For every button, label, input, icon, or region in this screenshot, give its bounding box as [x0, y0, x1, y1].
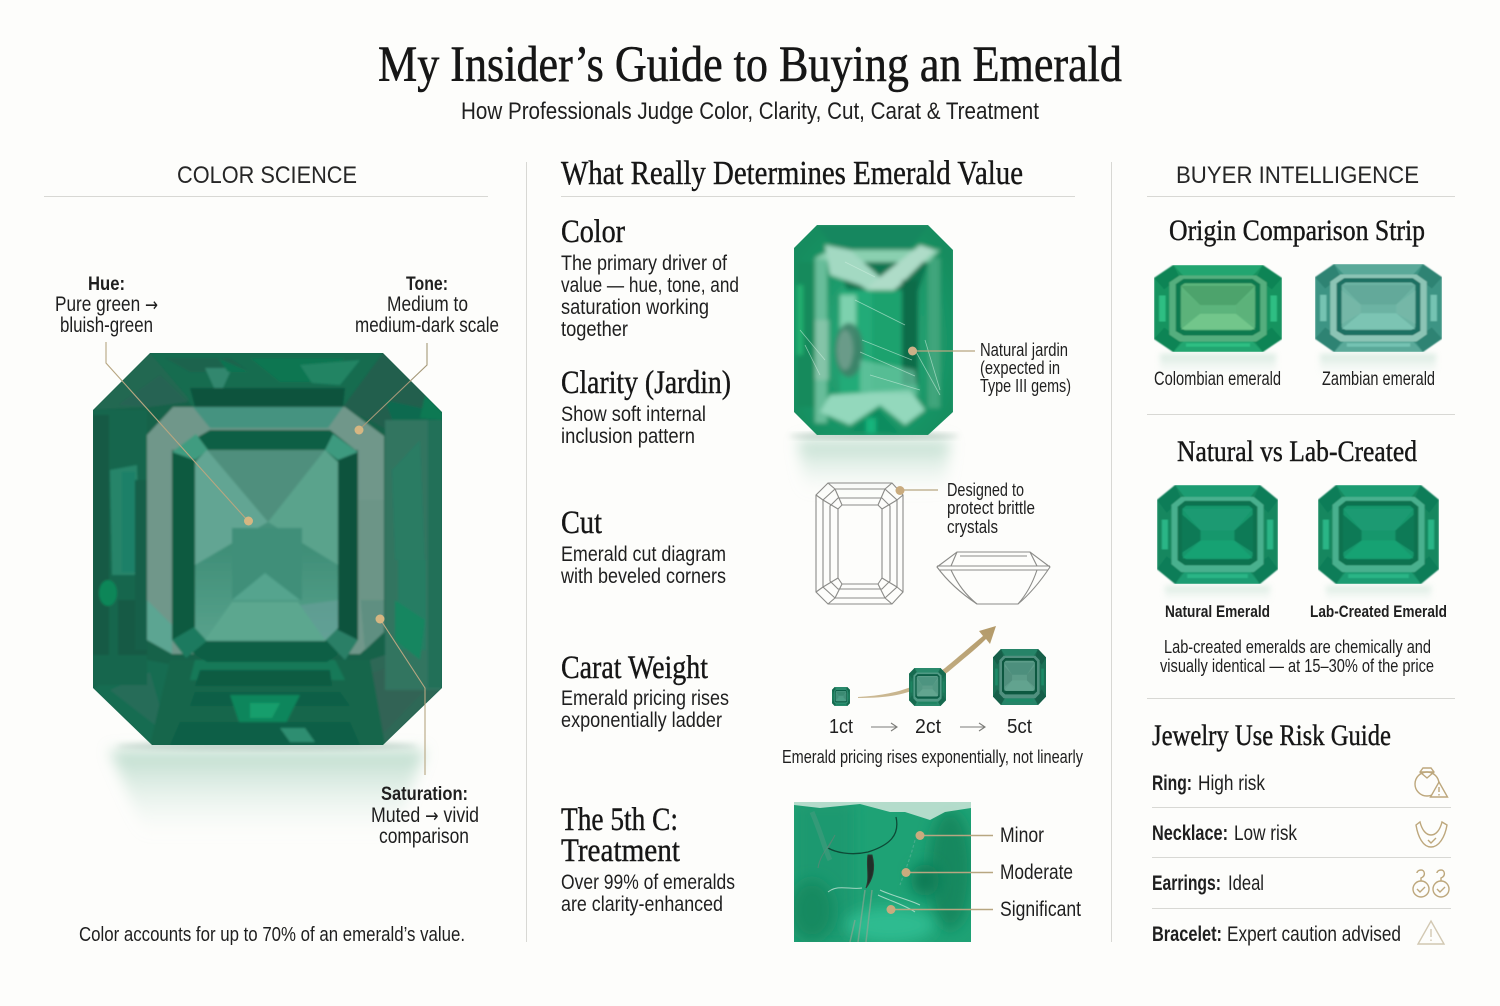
natural vs lab note: visually identical — at 15–30% of the price — [1160, 656, 1434, 676]
callout: jardin: Type III gems) — [980, 376, 1071, 396]
color footnote: Color accounts for up to 70% of an emerald’s value. — [79, 924, 465, 946]
callout: tone — [354, 274, 499, 434]
icon: necklace check — [1416, 822, 1447, 847]
bottom band — [150, 660, 385, 745]
gem: lab-created — [1318, 485, 1439, 584]
natural vs lab labels — [1165, 602, 1447, 621]
callout: hue: Hue: — [88, 274, 125, 295]
heading: natural vs lab: Natural vs Lab-Created — [1177, 435, 1417, 468]
text block: clarity: inclusion pattern — [561, 425, 695, 448]
row: necklace — [1152, 822, 1447, 847]
text block: treatment: are clarity-enhanced — [561, 893, 723, 916]
icon: ring warning — [1415, 768, 1448, 797]
carat ladder — [782, 626, 1083, 767]
callout: cut: Designed to — [947, 480, 1024, 500]
heading: color science: COLOR SCIENCE — [177, 162, 357, 189]
jardin gem reflection — [789, 433, 959, 492]
callout: treatment levels: Moderate — [1000, 861, 1073, 884]
carat labels: 2ct — [915, 716, 941, 738]
carat labels — [829, 716, 1032, 738]
icon: warning triangle — [1418, 921, 1444, 944]
callout: cut — [896, 480, 1035, 537]
natural vs lab note — [1160, 637, 1434, 676]
callout: tone: medium-dark scale — [355, 314, 499, 337]
jardin emerald — [790, 222, 1071, 438]
main gem reflection — [110, 742, 425, 835]
callout: tone: Medium to — [387, 293, 468, 316]
origin labels: Colombian emerald — [1154, 369, 1281, 390]
callout: hue: bluish-green — [60, 314, 153, 337]
growth arrow — [858, 626, 996, 698]
row: necklace: Necklace: — [1152, 822, 1228, 845]
natural vs lab — [1157, 435, 1447, 676]
text block: cut: with beveled corners — [560, 565, 726, 588]
text block: treatment: Treatment — [561, 833, 680, 869]
corners — [96, 355, 188, 409]
jewelry risk guide — [1152, 719, 1451, 946]
callout: cut: protect brittle — [947, 498, 1035, 518]
table — [193, 522, 340, 643]
text block: color: Color — [561, 214, 625, 250]
carat caption: Emerald pricing rises exponentially, not linearly — [782, 747, 1083, 767]
overall darkening of the outer bands — [90, 350, 445, 748]
text block: cut: Emerald cut diagram — [561, 543, 726, 566]
reflections — [1165, 586, 1431, 602]
callout: treatment levels: Significant — [1000, 898, 1081, 921]
row: necklace: Low risk — [1234, 822, 1297, 845]
callout: jardin: (expected in — [980, 358, 1060, 378]
origin labels — [1154, 369, 1435, 390]
heading: buyer intelligence: BUYER INTELLIGENCE — [1176, 162, 1419, 189]
callout: treatment levels: Minor — [1000, 824, 1044, 847]
text block: color: saturation working — [561, 296, 709, 319]
callout: hue — [55, 274, 253, 526]
top band — [154, 354, 380, 404]
text block: treatment: Over 99% of emeralds — [561, 871, 735, 894]
gem: zambian — [1315, 264, 1442, 352]
text block: color: together — [561, 318, 628, 341]
carat labels: 5ct — [1007, 716, 1032, 738]
dark inner band — [192, 429, 354, 662]
gem: 5ct — [993, 649, 1046, 705]
reflections — [1160, 354, 1436, 376]
heading: origin: Origin Comparison Strip — [1169, 214, 1425, 247]
row: earrings — [1152, 870, 1449, 897]
title: My Insider’s Guide to Buying an Emerald — [378, 37, 1122, 93]
panel: value determinants — [560, 155, 1083, 943]
row: bracelet: Expert caution advised — [1227, 923, 1401, 946]
callout: saturation: Saturation: — [381, 784, 468, 805]
main emerald illustration — [90, 350, 445, 748]
gem: natural — [1157, 485, 1278, 584]
panel: color science — [44, 162, 499, 946]
right band — [385, 420, 442, 690]
text block: clarity — [561, 365, 731, 448]
gem: 2ct — [909, 668, 946, 706]
text block: clarity: Show soft internal — [561, 403, 706, 426]
icon: earrings check — [1413, 870, 1449, 897]
text block: carat: Carat Weight — [561, 650, 708, 686]
cut diagram: top view — [816, 483, 903, 604]
callout: saturation: Muted → vivid — [371, 804, 479, 827]
text block: cut: Cut — [561, 505, 602, 541]
gem: colombian — [1154, 265, 1282, 352]
text block: carat: exponentially ladder — [561, 709, 722, 732]
heading: risk guide: Jewelry Use Risk Guide — [1152, 719, 1391, 752]
callout: jardin: Natural jardin — [980, 340, 1068, 360]
heading: value: What Really Determines Emerald Value — [561, 155, 1023, 192]
text block: color — [561, 214, 739, 341]
callout: cut: crystals — [947, 517, 998, 537]
row: earrings: Earrings: — [1152, 872, 1221, 895]
row: ring — [1152, 768, 1448, 797]
callout: tone: Tone: — [406, 274, 448, 295]
step ring — [147, 407, 384, 654]
origin comparison — [1154, 214, 1442, 390]
callout: jardin — [908, 340, 1071, 396]
carat labels: 1ct — [829, 716, 853, 738]
callout: hue: Pure green → — [55, 293, 158, 316]
callout: treatment levels — [886, 824, 1081, 921]
text block: cut — [560, 505, 726, 588]
treatment inclusion photo — [790, 802, 1081, 943]
text block: color: value — hue, tone, and — [561, 274, 739, 297]
text block: carat: Emerald pricing rises — [561, 687, 729, 710]
text block: treatment — [561, 802, 735, 916]
cut diagram: side view — [937, 552, 1050, 604]
text block: clarity: Clarity (Jardin) — [561, 365, 731, 401]
text block: carat — [561, 650, 729, 732]
natural vs lab note: Lab-created emeralds are chemically and — [1164, 637, 1431, 657]
text block: treatment: The 5th C: — [561, 802, 678, 838]
row: bracelet: Bracelet: — [1152, 923, 1222, 946]
natural vs lab labels: Lab-Created Emerald — [1310, 602, 1447, 621]
text block: color: The primary driver of — [561, 252, 727, 275]
callout: saturation — [371, 614, 479, 848]
panel: buyer intelligence — [1147, 162, 1455, 946]
callout: saturation: comparison — [379, 825, 469, 848]
row: ring: Ring: — [1152, 772, 1192, 795]
natural vs lab labels: Natural Emerald — [1165, 602, 1270, 621]
gem: 1ct — [832, 687, 850, 706]
subtitle: How Professionals Judge Color, Clarity, Cut, Carat & Treatment — [461, 98, 1039, 125]
row: bracelet — [1152, 921, 1444, 946]
origin labels: Zambian emerald — [1322, 369, 1435, 390]
left band — [110, 580, 147, 685]
row: ring: High risk — [1198, 772, 1265, 795]
row: earrings: Ideal — [1228, 872, 1264, 895]
